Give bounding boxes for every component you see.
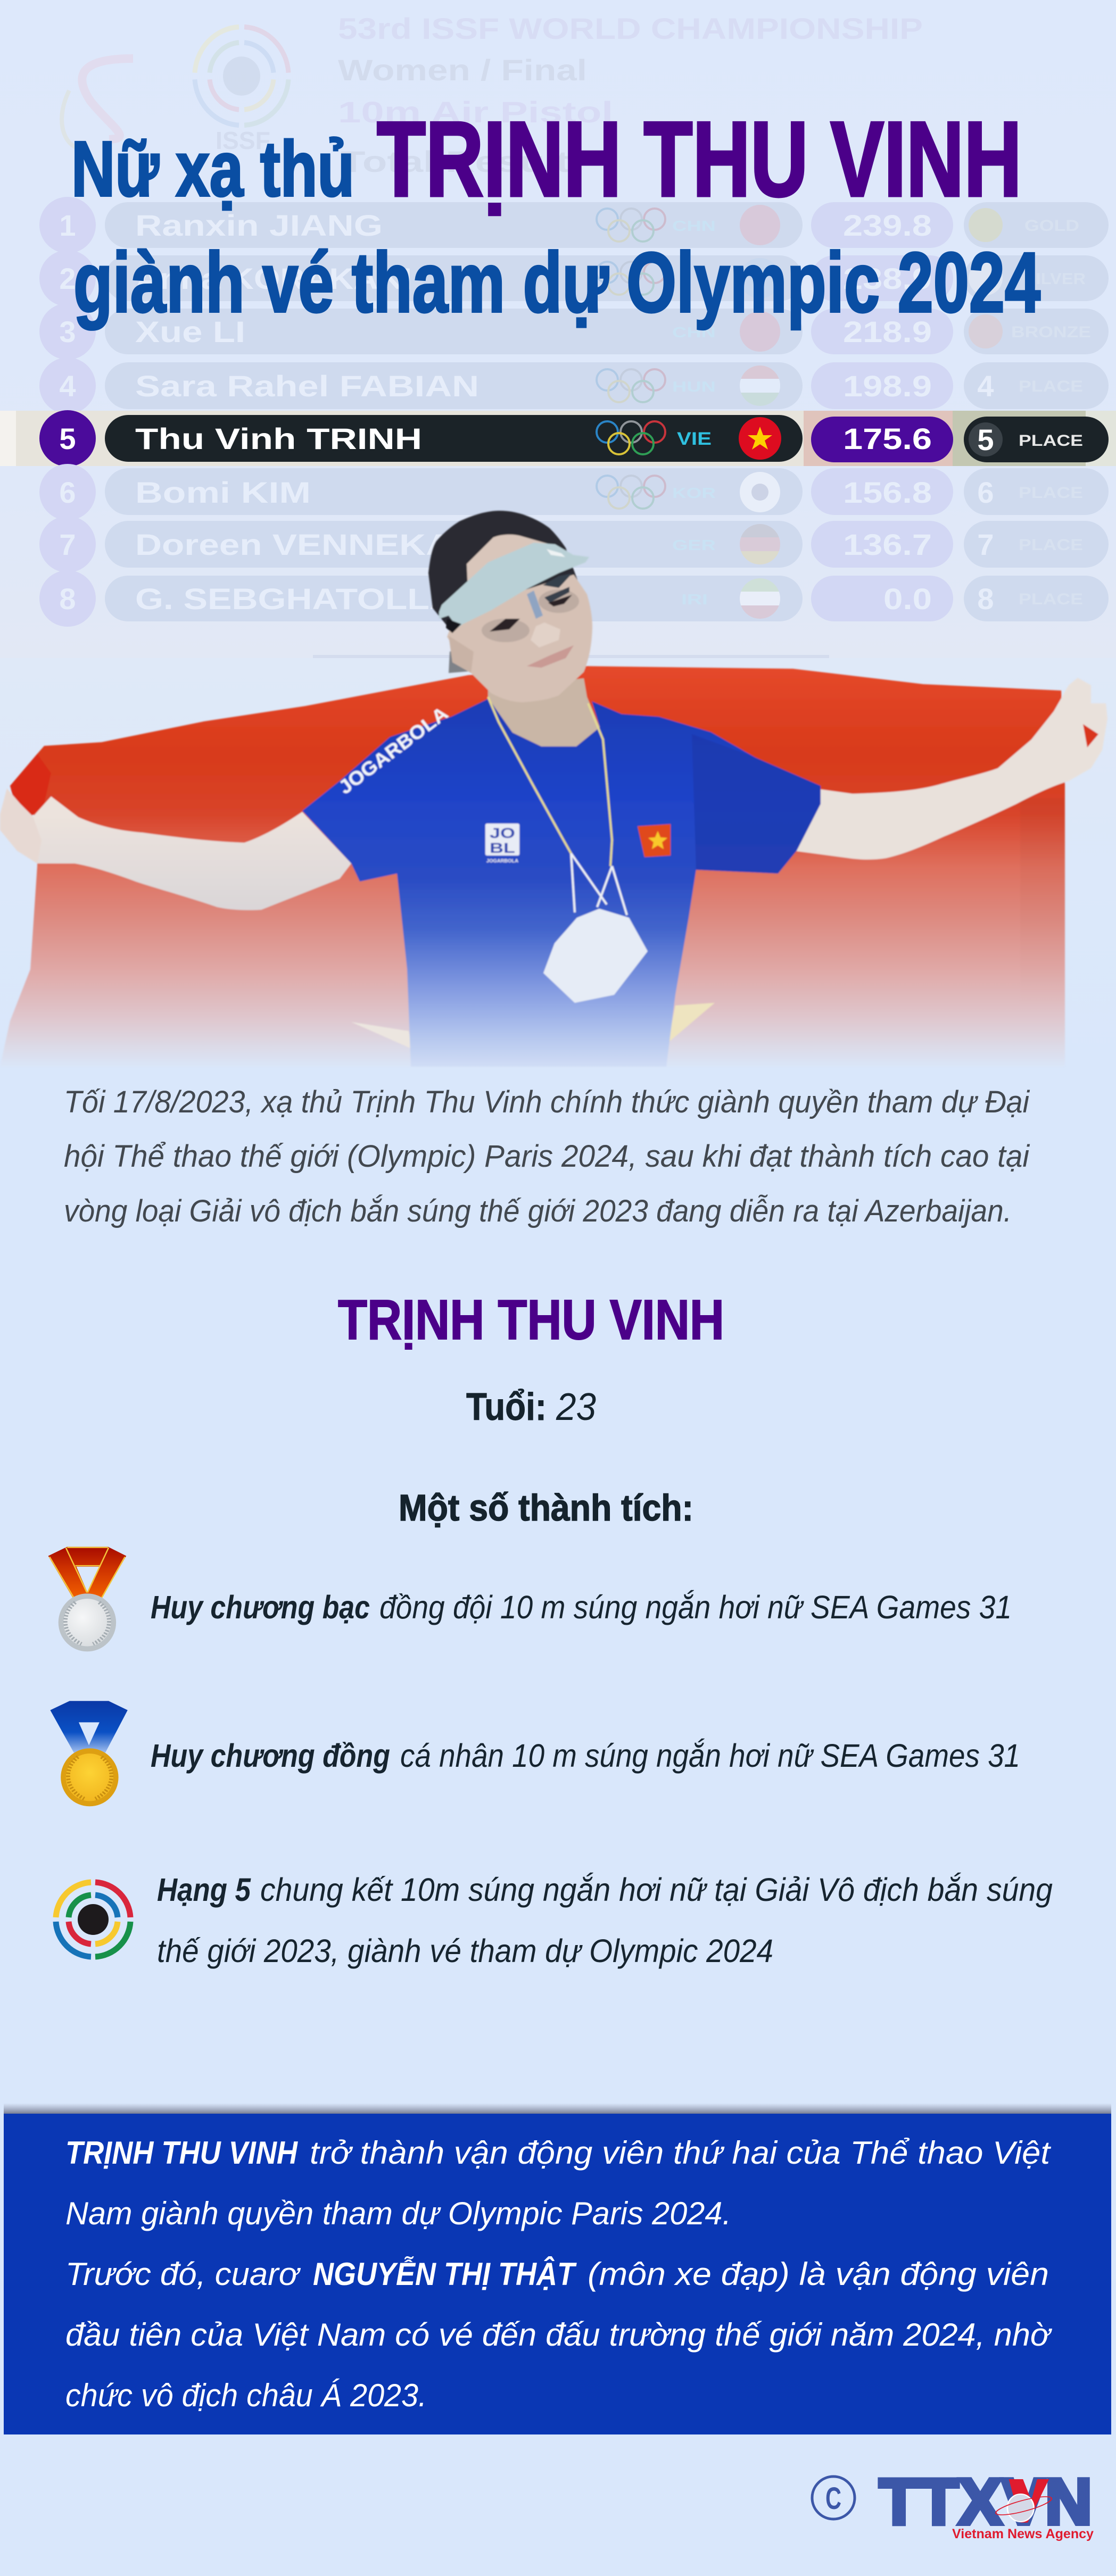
row 6: KOR (672, 485, 716, 501)
ponytail (449, 646, 468, 673)
icon: ISSF target (56, 1882, 130, 1957)
row 2 (39, 250, 1109, 306)
faint shooter logo (62, 59, 133, 149)
row 5 highlighted: Thu Vinh Trinh: 5 (59, 422, 76, 455)
callout line 3: (môn xe đạp) là vận động viên (588, 2256, 1049, 2292)
row 4: PLACE (1019, 378, 1083, 395)
row 3 (39, 303, 1109, 360)
faint event header: 53rd ISSF WORLD CHAMPIONSHIP (338, 12, 923, 45)
row 2: SILVER (1024, 270, 1086, 288)
faint ISSF label: ISSF (216, 127, 270, 154)
shirt flag patch (638, 824, 671, 857)
achievement 3 (157, 1872, 1053, 1969)
row 7: 7 (977, 528, 994, 561)
callout line 4: đầu tiên của Việt Nam có vé đến đấu trường thế giới năm 2024, nhờ (65, 2317, 1053, 2353)
lanyard (488, 697, 627, 915)
achievement 3: Hạng 5 (157, 1872, 251, 1908)
row 2: 2 (59, 262, 76, 295)
icon: gold medal (50, 1701, 128, 1806)
left eye (490, 619, 520, 631)
row 5 highlighted: Thu Vinh Trinh: Thu Vinh TRINH (135, 422, 422, 455)
achievement 1: đồng đội 10 m súng ngắn hơi nữ SEA Games 31 (379, 1589, 1012, 1625)
row 7: 136.7 (843, 528, 932, 561)
face mask (543, 909, 648, 1003)
logo tagline: Vietnam News Agency (952, 2527, 1094, 2541)
heading: achievements: Một số thành tích: (399, 1487, 693, 1528)
left fist (0, 788, 42, 863)
flag left fold knot (10, 754, 51, 817)
row 4: 198.9 (843, 369, 932, 403)
age: Tuổi: (466, 1386, 547, 1428)
ear (449, 636, 474, 673)
row 4: Sara Rahel FABIAN (135, 369, 479, 403)
row 4 (39, 358, 1109, 414)
row 5 highlighted: Thu Vinh Trinh (0, 410, 1116, 467)
glasses bridge (527, 591, 543, 619)
title: line 1 lead: Nữ xạ thủ (71, 126, 354, 213)
row 6: 6 (977, 476, 994, 509)
row 1: GOLD (1024, 217, 1079, 235)
row 6: PLACE (1019, 484, 1083, 502)
row 7 (39, 516, 1109, 572)
row 7: 7 (59, 528, 76, 561)
achievement 2: cá nhân 10 m súng ngắn hơi nữ SEA Games 31 (400, 1738, 1020, 1774)
achievement 1 (151, 1589, 1012, 1625)
forehead (467, 535, 553, 601)
callout line 3: NGUYỄN THỊ THẬT (313, 2256, 577, 2292)
icon: silver medal (48, 1547, 126, 1651)
callout line 3 (65, 2256, 1049, 2292)
row 6: 6 (59, 476, 76, 509)
flag stars fragments (351, 1003, 715, 1049)
visor highlight (547, 549, 565, 557)
faint event header (338, 12, 923, 178)
left arm (0, 788, 351, 910)
callout line 3: Trước đó, cuarơ (65, 2256, 301, 2292)
intro paragraph: hội Thể thao thế giới (Olympic) Paris 2024, sau khi đạt thành tích cao tại (64, 1139, 1030, 1174)
row 3: 218.9 (843, 315, 932, 348)
row 8: 0.0 (883, 582, 932, 616)
right eye with shooting glasses (543, 574, 572, 606)
logo emblem (994, 2479, 1054, 2523)
achievement 3: thế giới 2023, giành vé tham dự Olympic 2024 (157, 1933, 773, 1969)
intro paragraph: Tối 17/8/2023, xạ thủ Trịnh Thu Vinh chính thức giành quyền tham dự Đại (64, 1085, 1030, 1119)
row 8: IRI (681, 591, 708, 608)
row 8: G. SEBGHATOLLAHI (135, 582, 492, 616)
shirt logo: JOGARBOLA (486, 858, 519, 863)
row 7: Doreen VENNEKAMP (135, 528, 508, 561)
row 1 (39, 197, 1109, 253)
row 5 highlighted: Thu Vinh Trinh: 5 (977, 423, 994, 456)
row 8: PLACE (1019, 591, 1083, 608)
row 4: HUN (672, 378, 716, 395)
eye shadows (482, 589, 579, 642)
age (466, 1386, 596, 1428)
hair clip (446, 619, 461, 633)
callout line 5: chức vô địch châu Á 2023. (65, 2378, 427, 2413)
flag right fold shading (1020, 798, 1065, 1011)
row 4: 4 (59, 369, 76, 403)
row 1: CHN (672, 218, 716, 234)
row 8: 8 (59, 582, 76, 616)
callout line 1: trở thành vận động viên thứ hai của Thể thao Việt (310, 2135, 1051, 2171)
icon: copyright: C (825, 2481, 841, 2516)
callout line 1: TRỊNH THU VINH (65, 2135, 299, 2171)
achievement 1: Huy chương bạc (151, 1589, 370, 1625)
title (71, 100, 1040, 330)
heading: athlete name: TRỊNH THU VINH (338, 1289, 724, 1351)
flag end in right hand (1083, 724, 1098, 747)
faint ISSF target logo (195, 27, 288, 125)
achievement 3: chung kết 10m súng ngắn hơi nữ tại Giải Vô địch bắn súng (260, 1872, 1053, 1908)
row 8 (39, 570, 1109, 627)
row 4: 4 (977, 369, 994, 403)
hair (428, 511, 577, 628)
intro paragraph (64, 1085, 1030, 1228)
shirt shoulder print: JOGARBOLA (334, 702, 452, 798)
achievement 2: Huy chương đồng (151, 1738, 390, 1774)
row 2: 238.9 (843, 262, 932, 295)
mouth (527, 645, 574, 668)
achievement 2 (151, 1738, 1020, 1774)
row 3: BRONZE (1011, 323, 1091, 341)
faint event header: Total Result (341, 145, 569, 178)
flag (0, 666, 1065, 1067)
sun visor (439, 543, 589, 628)
row 6: 156.8 (843, 476, 932, 509)
row 7: GER (672, 537, 716, 553)
row 5 highlighted: Thu Vinh Trinh: PLACE (1019, 432, 1083, 450)
row 3: 3 (59, 315, 76, 348)
nose (531, 622, 560, 647)
right arm (793, 678, 1107, 860)
row 6 (39, 464, 1109, 520)
row 5 highlighted: Thu Vinh Trinh: 175.6 (843, 422, 932, 455)
face (447, 575, 592, 702)
age: 23 (556, 1386, 596, 1428)
shirt (302, 699, 821, 1067)
faint event header: Women / Final (338, 53, 587, 87)
shirt logo: BL (490, 840, 515, 856)
row 3: CHN (672, 324, 716, 340)
row 3: Xue LI (135, 315, 245, 348)
shirt logo: JO (490, 825, 515, 841)
logo: TTXVN Vietnam News Agency: TTXVN (879, 2465, 1092, 2538)
row 1: Ranxin JIANG (135, 209, 383, 242)
row 1: 1 (59, 209, 76, 242)
icon: copyright (812, 2477, 855, 2519)
shirt sleeve shade (692, 734, 821, 874)
row 8: 8 (977, 582, 994, 616)
callout line 2: Nam giành quyền tham dự Olympic Paris 2024. (65, 2196, 731, 2231)
shirt logo (485, 824, 519, 863)
scoreboard background image (0, 17, 1116, 658)
row 6: Bomi KIM (135, 476, 311, 509)
panel: summary callout (4, 2103, 1111, 2434)
row 7: PLACE (1019, 536, 1083, 554)
intro paragraph: vòng loại Giải vô địch bắn súng thế giới 2023 đang diễn ra tại Azerbaijan. (64, 1194, 1012, 1228)
row 2: Anna KORAKAKI (135, 262, 412, 295)
row 1: 239.8 (843, 209, 932, 242)
row 5 highlighted: Thu Vinh Trinh: VIE (677, 429, 712, 449)
athlete photo with Vietnamese flag (0, 511, 1107, 1067)
neck (488, 678, 600, 746)
faint event header: 10m Air Pistol (338, 95, 613, 129)
